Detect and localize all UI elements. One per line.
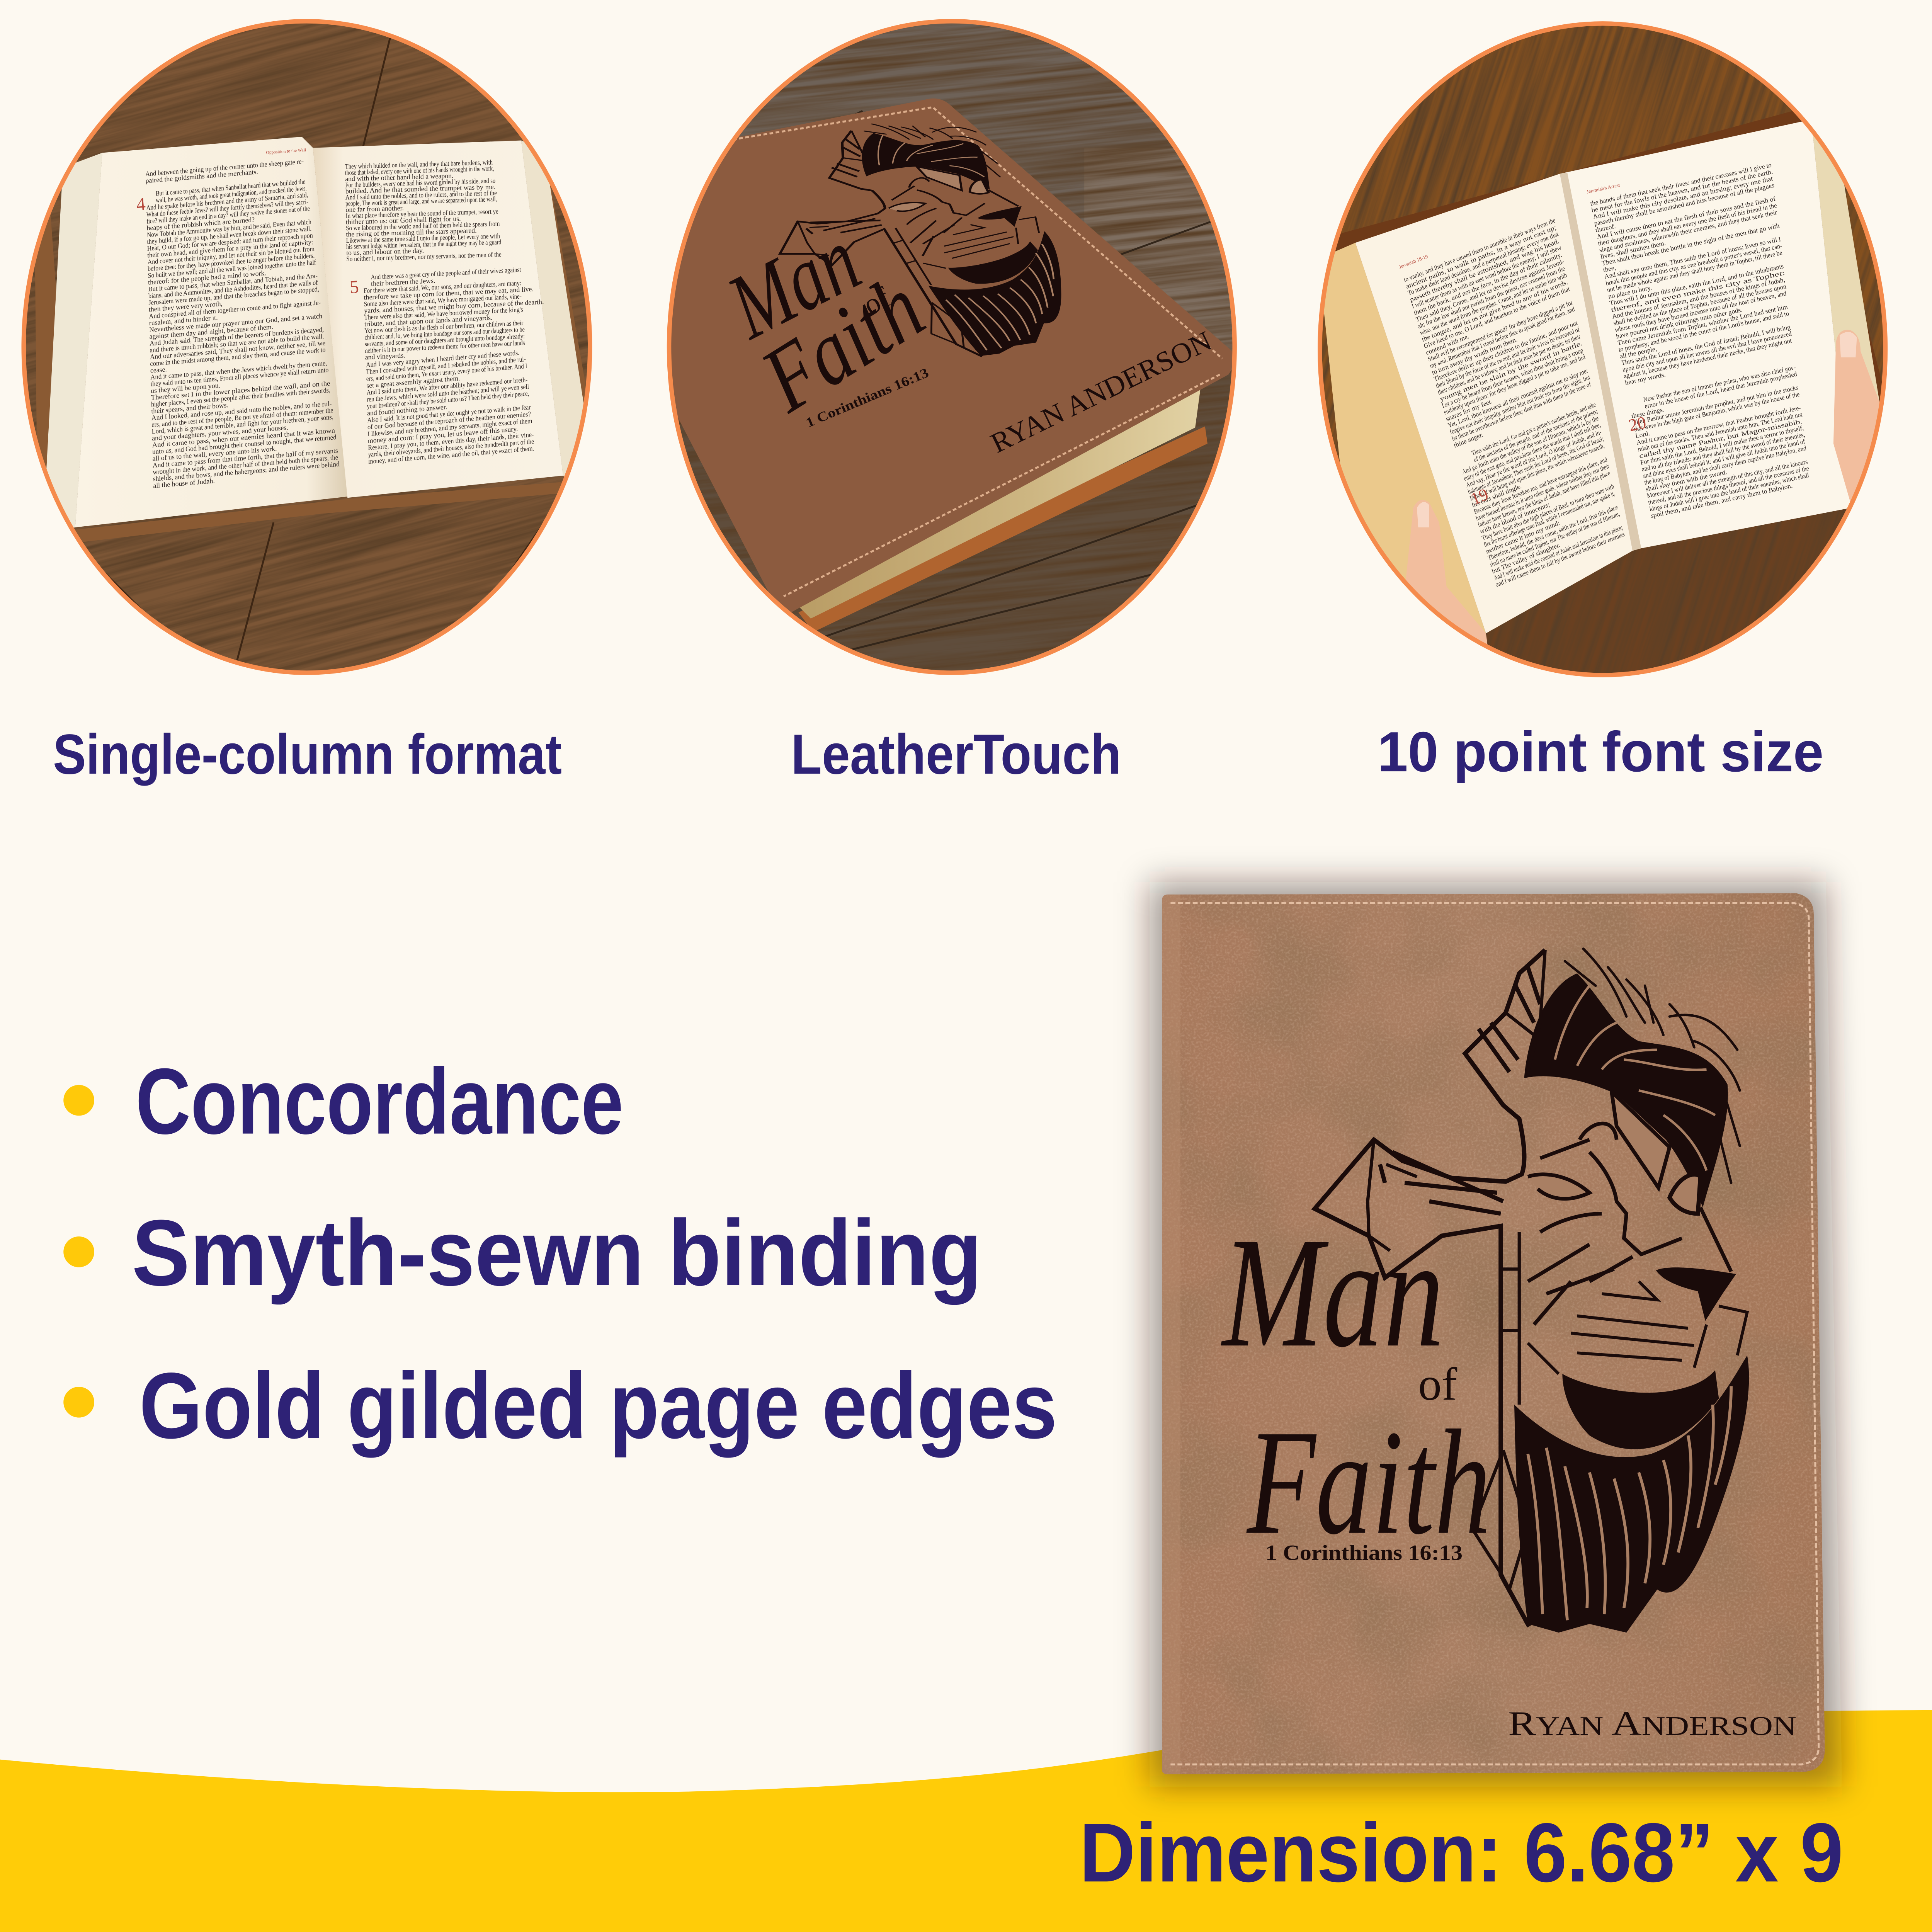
- left page text: Because they have forsaken me, and have estranged this place, and: [1473, 456, 1608, 515]
- cross hatching: [1380, 967, 1540, 1214]
- left page text: wise, nor the word from the prophet. Come, and let us smite him with: [1419, 271, 1568, 337]
- left page text: and your daughters, your wives, and your houses.: [152, 423, 288, 442]
- leather texture: [1158, 887, 1830, 1781]
- right page text bottom: ren the Jews, which were sold unto the heathen; and will ye even sell: [367, 383, 529, 403]
- right page text: and thine eyes shall behold it: and I will give all Judah into the hand of: [1642, 438, 1806, 480]
- left page text: fathers have known, nor the kings of Judah, and have filled this place: [1477, 469, 1611, 529]
- lower mane mass: [1514, 1355, 1749, 1633]
- right page text top: those that laded, every one with one of his hands wrought in the work,: [345, 164, 494, 177]
- yellow wave footer: [0, 1710, 1932, 1932]
- right page text bottom: yards, their oliveyards, and their houses, also the hundredth part of the: [368, 437, 534, 458]
- title lettering: Man: Man: [1220, 1205, 1444, 1380]
- right page text: shall be defiled as the place of Tophet, because of all the houses upon: [1613, 282, 1787, 327]
- left page text: to turn away thy wrath from them.: [1431, 335, 1518, 376]
- left page text: And I will make void the counsel of Judah and Jerusalem in this place;: [1493, 524, 1624, 582]
- right page text: Thus saith the Lord of hosts, the God of Israel; Behold, I will bring: [1621, 323, 1791, 367]
- chapter number 20: 20: [1627, 413, 1648, 435]
- left page text: They have built also the high places of Baal, to burn their sons with: [1481, 483, 1615, 542]
- left page text: Jerusalem were made up, and that the breaches began to be stopped,: [148, 285, 319, 306]
- left page text: fice? will they make an end in a day? will they revive the stones out of the: [146, 204, 310, 225]
- left page text: then they were very wroth,: [149, 299, 223, 313]
- left page text: but The valley of slaughter.: [1491, 541, 1561, 575]
- right page text: hear my words.: [1624, 371, 1666, 387]
- left page text: my soul. Remember that I stood before thee to speak good for them, and: [1429, 305, 1576, 370]
- left page text: Lord, which is great and terrible, and fight for your brethren, your sons,: [152, 413, 333, 435]
- right page text: thereof, and even make this city as Tophet:: [1610, 269, 1786, 313]
- cross inner lines: [1368, 950, 1545, 1590]
- left page: [75, 137, 347, 527]
- left page text: And he spake before his brethren and the army of Samaria, and said,: [146, 191, 308, 212]
- left page text: Behold, I will bring evil upon this place, the which whosoever heareth,: [1469, 442, 1605, 502]
- left page text: them the back, and not the face, in the day of their calamity.: [1413, 251, 1563, 317]
- left page text: shall no more be called Tophet, nor The valley of the son of Hinnom,: [1489, 510, 1621, 568]
- running head right page: Jeremiah's Arrest: [1586, 182, 1621, 195]
- left page text: So built we the wall; and all the wall was joined together unto the half: [148, 258, 316, 279]
- muzzle whisker rows: [1528, 1281, 1747, 1374]
- brow strap: [1612, 1092, 1670, 1188]
- right page text: the hands of them that seek their lives: and their carcases will I give to: [1590, 161, 1772, 207]
- photo: hands holding open Bible: [1004, 0, 1932, 974]
- left page text: habitants of Jerusalem; Thus saith the Lord of hosts, the God of Israel;: [1467, 435, 1604, 496]
- right page text top: builded. And he that sounded the trumpet was by me.: [345, 183, 496, 195]
- bullet 1: [63, 1085, 94, 1116]
- left page text: And between the going up of the corner unto the sheep gate re-: [145, 157, 304, 178]
- face creases: [1528, 1124, 1731, 1325]
- left page text: ers, and to the rest of the people, Be not ye afraid of them: remember the: [151, 406, 333, 429]
- right page text top: the rising of the morning till the stars appeared.: [346, 226, 477, 238]
- chapter number 4: 4: [135, 194, 146, 215]
- right page text top: [345, 158, 502, 263]
- brown wood table: [1004, 0, 1932, 974]
- right page text: And I will make this city desolate, and an hissing; every one that: [1592, 175, 1774, 221]
- left page text: their own head, and give them for a prey in the land of captivity:: [147, 238, 313, 259]
- upper mane stray hairs: [1565, 949, 1740, 1183]
- left page text: bians, and the Ammonites, and the Ashdodites, heard that the walls of: [148, 278, 318, 300]
- left page text: Then said they, Come, and let us devise devices against Jeremi-: [1415, 257, 1565, 323]
- left page text: they said unto us ten times, From all places whence ye shall return unto: [150, 366, 329, 388]
- left page text: Thus saith the Lord, Go and get a potter's earthen bottle, and take: [1471, 401, 1597, 457]
- grey wood table: [446, 0, 1530, 908]
- right page text middle: children: and, lo, we bring into bondage our sons and our daughters to be: [364, 325, 525, 341]
- leather strip behind book: [1325, 106, 1891, 493]
- running head left page: Jeremiah 18-19: [1398, 254, 1429, 270]
- right page text: these things.: [1631, 406, 1665, 420]
- dimension label: Dimension: 6.68” x 9: [1079, 1806, 1843, 1899]
- right page text: Now Pashur the son of Immer the priest, who was also chief gov-: [1643, 364, 1796, 403]
- right page text: ernor in the house of the Lord, heard that Jeremiah prophesied: [1644, 370, 1798, 410]
- left page stack: [1318, 243, 1486, 633]
- left page text: ah; for the law shall not perish from the priest, nor counsel from the: [1417, 265, 1566, 330]
- left page text: paired the goldsmiths and the merchants.: [145, 168, 258, 185]
- left page text: Therefore, behold, the days come, saith the Lord, that this place: [1487, 503, 1619, 562]
- left page text: And our adversaries said, They shall not know, neither see, till we: [150, 339, 325, 361]
- photo frame: left ellipse: [24, 21, 590, 673]
- right page text top: Likewise at the same time said I unto the people, Let every one with: [346, 232, 500, 244]
- left page text: Therefore set I in the lower places behind the wall, and on the: [151, 379, 330, 401]
- left page text: forgive not their iniquity, neither blot out their sin from thy sight, but: [1449, 373, 1591, 436]
- left page text: higher places, I even set the people after their families with their swords,: [151, 386, 330, 408]
- right page text: against it, because they have hardened their necks, that they might not: [1623, 337, 1793, 380]
- left page text: Give heed to me, O Lord, and hearken to the voice of them that: [1423, 285, 1571, 350]
- right page text top: people, The work is great and large, and we are separated upon the wall,: [345, 195, 497, 207]
- feature: smyth-sewn binding: Smyth-sewn binding: [132, 1201, 982, 1305]
- stitching: [1170, 903, 1819, 1764]
- left page text: Now Tobiah the Ammonite was by him, and he said, Even that which: [147, 218, 311, 239]
- left page text: all of us to the wall, every one unto his work.: [152, 445, 277, 463]
- right page text: kings of Judah will I give into the hand of their enemies, which shall: [1649, 471, 1810, 513]
- right page text bottom: And I said unto them, We after our ability have redeemed our breth-: [366, 376, 527, 396]
- left page text: thine anger.: [1453, 431, 1484, 449]
- right page text: their daughters, and they shall eat every one the flesh of his friend in the: [1597, 202, 1777, 247]
- feature: concordance: Concordance: [136, 1049, 624, 1154]
- cover stitching: [727, 107, 1222, 596]
- right page text middle: Some also there were that said, We have mortgaged our lands, vine-: [364, 292, 522, 308]
- right page text: shall slay them with the sword.: [1645, 468, 1728, 493]
- right page text: lives, shall straiten them.: [1600, 239, 1666, 260]
- right page text middle: There were also that said, We have borrowed money for the king's: [364, 306, 523, 321]
- left page text: before thee: for they have provoked thee to anger before the builders.: [148, 252, 315, 273]
- left page text: thereof: for the people had a mind to work.: [148, 269, 266, 286]
- right page text middle: their brethren the Jews.: [371, 277, 435, 287]
- leather cover edges: [34, 150, 589, 543]
- right page text bottom: money, and of the corn, the wine, and the oil, that ye exact of them.: [368, 444, 534, 465]
- right page text: Then Pashur smote Jeremiah the prophet, and put him in the stocks: [1632, 384, 1799, 427]
- right page text: miah out of the stocks. Then said Jeremiah unto him, The Lord hath not: [1637, 411, 1803, 453]
- wood table: [0, 0, 921, 984]
- cover lettering: Faith: Faith: [744, 255, 940, 432]
- caption: single-column format: Single-column format: [53, 723, 562, 786]
- right page text: be meat for the fowls of the heaven, and for the beasts of the earth.: [1591, 168, 1774, 214]
- left page text: passeth thereby shall be astonished, and wag his head.: [1409, 237, 1560, 303]
- book cover drop shadow: [1150, 882, 1842, 1787]
- right page text middle: servants, and some of our daughters are brought unto bondage already:: [365, 332, 525, 348]
- cover lettering: verse: 1 Corinthians 16:13: [804, 365, 931, 430]
- left eye: [1528, 1174, 1590, 1199]
- left page text: But it came to pass, that when Sanballat, and Tobiah, and the Ara-: [148, 272, 318, 293]
- right hand: [1833, 330, 1898, 517]
- mouth and chin shadow: [1562, 1370, 1719, 1449]
- left page text: And Judah said, The strength of the bearers of burdens is decayed,: [150, 325, 324, 347]
- right page text: Then came Jeremiah from Tophet, whither the Lord had sent him: [1617, 303, 1789, 347]
- left page text: Nevertheless we made our prayer unto our God, and set a watch: [149, 312, 322, 333]
- upper mane highlights: [1555, 986, 1715, 1170]
- left page text: And it came to pass from that time forth, that the half of my servants: [153, 447, 338, 469]
- chapter number 19: 19: [1468, 485, 1491, 509]
- left page text: have burned incense in it unto other gods, whom neither they nor their: [1475, 462, 1610, 522]
- left page text: cease.: [150, 365, 167, 374]
- bullet 2: [63, 1236, 94, 1267]
- right page text: For thus saith the Lord, Behold, I will make thee a terror to thyself,: [1640, 424, 1804, 466]
- right page text: upon this city and upon all her towns all the evil that I have pronounced: [1622, 330, 1793, 373]
- nose: [1656, 1267, 1736, 1321]
- left page text: snares for my feet.: [1445, 397, 1493, 423]
- cover base: [1162, 893, 1825, 1774]
- right page stack: [1811, 119, 1880, 508]
- left page text: And go forth unto the valley of the son of Hinnom, which is by the: [1461, 414, 1600, 476]
- caption: LeatherTouch: LeatherTouch: [791, 723, 1121, 786]
- left page text: to vanity, and they have caused them to stumble in their ways from the: [1403, 216, 1556, 284]
- right page text: not be made whole again: and they shall bury them in Tophet, till there be: [1606, 249, 1783, 294]
- left page text: But it came to pass, that when Sanballat heard that we builded the: [156, 177, 306, 197]
- left page text: and there is much rubbish; so that we are not able to build the wall.: [150, 332, 324, 354]
- right page text top: So neither I, nor my brethren, nor my servants, nor the men of the: [346, 250, 502, 263]
- right page text middle: therefore we take up corn for them, that we may eat, and live.: [364, 285, 534, 301]
- title lettering: Faith: Faith: [1245, 1399, 1491, 1566]
- left page text: wrought in the work, and the other half of them held both the spears, the: [153, 453, 338, 476]
- verse reference: 1 Corinthians 16:13: [1265, 1541, 1463, 1565]
- left page text: [1403, 216, 1648, 588]
- right page text top: one far from another.: [345, 204, 404, 213]
- left page text: his ears shall tingle.: [1471, 482, 1522, 509]
- gilded page block: [774, 382, 1201, 619]
- right page text: And I will cause them to eat the flesh of their sons and the flesh of: [1596, 195, 1776, 240]
- right page text middle: Yet now our flesh is as the flesh of our brethren, our children as their: [364, 319, 524, 335]
- right page text top: And I said unto the nobles, and to the rulers, and to the rest of the: [345, 189, 497, 201]
- right page text bottom: [366, 348, 534, 465]
- left page text: entry of the east gate, and proclaim there the words that I shall tell thee,: [1463, 421, 1602, 482]
- left page text: suddenly upon them: for they have digged a pit to take me, and hid: [1443, 353, 1586, 416]
- right page text: And shalt say unto them, Thus saith the Lord of hosts; Even so will I: [1604, 235, 1782, 281]
- right page text: [1590, 161, 1833, 519]
- left page text: the tongue, and let us not give heed to any of his words.: [1421, 278, 1569, 343]
- right page text middle: neither is it in our power to redeem them; for other men have our lands: [365, 339, 525, 354]
- left page text: And it came to pass, when our enemies heard that it was known: [152, 427, 335, 449]
- photo frame: right ellipse: [1320, 24, 1885, 675]
- right page text top: In what place therefore ye hear the sound of the trumpet, resort ye: [346, 207, 498, 219]
- right page text: thee,: [1602, 264, 1616, 274]
- right page text: whose roofs they have burned incense unto all the host of heaven, and: [1614, 289, 1787, 333]
- right page text bottom: and found nothing to answer.: [367, 403, 447, 417]
- right page text top: They which builded on the wall, and they that bare burdens, with: [345, 158, 493, 170]
- right page text bottom: set a great assembly against them.: [366, 374, 460, 389]
- right page text: And the houses of Jerusalem, and the houses of the kings of Judah,: [1612, 276, 1786, 320]
- right page text: and to all thy friends: and they shall fall by the sword of their enemies,: [1641, 431, 1806, 473]
- left page text: with the blood of innocents;: [1479, 501, 1551, 535]
- right page text middle: tribute, and that upon our lands and vineyards.: [364, 314, 493, 328]
- running heads: Opposition to the Wall: [266, 148, 306, 155]
- left page stack: [46, 153, 102, 530]
- left page text: heaps of the rubbish which are burned?: [146, 216, 255, 232]
- chapter number 5: 5: [349, 277, 359, 298]
- left page text: they build, if a fox go up, he shall even break down their stone wall.: [147, 224, 311, 245]
- leather book cover: [1158, 887, 1830, 1781]
- feature list: [63, 1049, 1057, 1458]
- right page text: all the people,: [1619, 345, 1657, 360]
- cross outline: [1315, 950, 1545, 1626]
- right page text: Then shalt thou break the bottle in the sight of the men that go with: [1601, 222, 1780, 267]
- cover lettering: Man: Man: [712, 207, 875, 359]
- left page text: fire for burnt offerings unto Baal, which I commanded not, nor spake it,: [1483, 490, 1616, 549]
- fingernails: [1417, 332, 1857, 527]
- left page text: their children, and be widows; and let their men be put to death; let their: [1437, 333, 1581, 396]
- left page text: I will scatter them as with an east wind before the enemy; I will shew: [1411, 244, 1562, 310]
- right page text: break this people and this city, as one breaketh a potter's vessel, that can-: [1605, 242, 1783, 287]
- right page text bottom: And I was very angry when I heard their cry and these words.: [366, 349, 520, 369]
- personalised name: R YAN A NDERSON: [1508, 1704, 1796, 1743]
- feature: gold gilded page edges: Gold gilded page edges: [139, 1354, 1057, 1458]
- left page text: come in the midst among them, and slay them, and cause the work to: [150, 346, 326, 367]
- right page text top: So we laboured in the work: and half of them held the spears from: [346, 219, 500, 232]
- back cover strip: [798, 426, 1208, 632]
- left page text: Yet, Lord, thou knowest all their counsel against me to slay me:: [1447, 367, 1589, 429]
- left page text: Let a cry be heard from their houses, when thou shalt bring a troop: [1441, 346, 1584, 410]
- left page text: unto us, and God had brought their counsel to nought, that we returned: [152, 433, 337, 456]
- right page text middle: yards, and houses, that we might buy corn, because of the dearth.: [364, 298, 544, 315]
- right page text bottom: of our God because of the reproach of the heathen our enemies?: [367, 410, 531, 431]
- left page text: And it came to pass, that when the Jews which dwelt by them came,: [150, 359, 327, 381]
- right page text: spoil them, and take them, and carry them to Babylon.: [1650, 482, 1793, 519]
- left page text: rusalem, and to hinder it.: [149, 314, 218, 327]
- right page text top: his servant lodge within Jerusalem, that in the night they may be a guard: [346, 238, 501, 250]
- right page text top: For the builders, every one had his sword girded by his side, and so: [345, 177, 495, 189]
- left page text: and I will cause them to fall by the sword before their enemies: [1495, 530, 1626, 588]
- right page text: thereof, and all the precious things thereof, and all the treasures of the: [1648, 464, 1810, 506]
- left page text: young men be slain by the sword in battle.: [1439, 339, 1583, 403]
- left page text: And say, Hear ye the word of the Lord, O kings of Judah, and in-: [1465, 428, 1602, 489]
- left page text: shields, and the bows, and the habergeons; and the rulers were behind: [153, 460, 340, 483]
- right page text top: to us, and labour on the day.: [346, 247, 424, 257]
- right page text: Thus will I do unto this place, saith the Lord, and to the inhabitants: [1609, 262, 1784, 307]
- upper mane mass: [1524, 973, 1728, 1208]
- left page text: What do these feeble Jews? will they fortify themselves? will they sacri-: [146, 198, 308, 218]
- lower mane strands: [1528, 1386, 1731, 1620]
- left page text: And I looked, and rose up, and said unto the nobles, and to the rul-: [151, 400, 332, 422]
- left page text: And cover not their iniquity, and let not their sin be blotted out from: [148, 245, 315, 266]
- right page: [1560, 119, 1852, 551]
- right page text: passeth thereby shall be astonished and hiss because of all the plagues: [1594, 182, 1775, 227]
- right page text: called thy name Pashur, but Magor-missabib.: [1638, 418, 1803, 460]
- photo frame: middle ellipse: [669, 21, 1235, 673]
- left page text: us they will be upon you.: [151, 381, 220, 395]
- cover lettering: name: RYAN ANDERSON: [986, 325, 1216, 459]
- right page text middle: For there were that said, We, our sons, and our daughters, are many:: [364, 279, 521, 294]
- left page text: [145, 155, 340, 490]
- right page text: that were in the high gate of Benjamin, which was by the house of the: [1633, 390, 1800, 433]
- right page: [313, 141, 563, 498]
- right page text: no place to bury.: [1608, 284, 1652, 300]
- left page text: their blood by the force of the sword; and let their wives be bereaved of: [1435, 326, 1580, 389]
- left page text: And conspired all of them together to come and to fight against Je-: [149, 299, 321, 320]
- left page text: wall, he was wroth, and took great indignation, and mocked the Jews.: [156, 184, 307, 204]
- right page text: siege and straitness, wherewith their enemies, and they that seek their: [1599, 209, 1777, 254]
- left page text: of the ancients of the people, and of the ancients of the priests;: [1473, 407, 1599, 464]
- right page text bottom: ers, and said unto them, Ye exact usury, every one of his brother. And I: [366, 362, 527, 383]
- right page text: And it came to pass on the morrow, that Pashur brought forth Jere-: [1636, 404, 1802, 446]
- left page text: let them be overthrown before thee; deal thus with them in the time of: [1451, 380, 1592, 442]
- photo: open Bible on wood, single column: [26, 23, 588, 671]
- right page text middle: And there was a great cry of the people and of their wives against: [371, 265, 521, 281]
- right page text bottom: Restore, I pray you, to them, even this day, their lands, their vine-: [368, 430, 534, 452]
- caption: 10 point font size: 10 point font size: [1378, 720, 1823, 784]
- left page text: ancient paths, to walk in paths, in a way not cast up;: [1405, 223, 1557, 290]
- left page text: Therefore deliver up their children to the famine, and pour out: [1433, 319, 1578, 383]
- left page text: Hear, O our God; for we are despised: and turn their reproach upon: [147, 231, 313, 252]
- right page text top: thither unto us: our God shall fight for us.: [346, 214, 461, 226]
- right page text: the king of Babylon, and he shall carry them captive into Babylon, and: [1644, 444, 1807, 486]
- left page text: neither came it into my mind:: [1485, 519, 1561, 555]
- right page text bottom: I likewise, and my brethren, and my servants, might exact of them: [367, 417, 532, 438]
- left page text: against them day and night, because of them.: [149, 323, 273, 340]
- leather front cover: [653, 99, 1233, 612]
- photo: closed leather Bible: [446, 0, 1530, 908]
- gutter shadow: [1560, 172, 1641, 551]
- right page text: have poured out drink offerings unto other gods.: [1616, 306, 1743, 340]
- right page text top: and with the other hand held a weapon.: [345, 172, 454, 183]
- right page text bottom: your brethren? or shall they be sold unto us? Then held they their peace,: [367, 389, 529, 410]
- left page text: To make their land desolate, and a perpetual hissing; every one that: [1407, 230, 1559, 297]
- right page text: Lord.: [1634, 429, 1650, 440]
- right page text bottom: Then I consulted with myself, and I rebuked the nobles, and the rul-: [366, 355, 526, 376]
- lion and cross emblem on cover: [726, 97, 1102, 394]
- left page: [1355, 174, 1633, 633]
- right page text: to prophesy; and he stood in the court of the Lord's house; and said to: [1618, 310, 1789, 354]
- left page text: all the house of Judah.: [153, 477, 215, 490]
- right page text: Moreover I will deliver all the strength of this city, and all the labours: [1646, 458, 1808, 500]
- right page stack: [521, 141, 585, 478]
- left page text: their spears, and their bows.: [151, 401, 228, 415]
- left page text: contend with me.: [1425, 332, 1470, 357]
- left hand: [1386, 500, 1493, 690]
- right eye: [1670, 1174, 1701, 1214]
- left page text: Shall evil be recompensed for good? for they have digged a pit for: [1427, 299, 1573, 363]
- lion and cross emblem: [1315, 949, 1749, 1633]
- bullet 3: [63, 1387, 94, 1418]
- cover lettering: of: of: [858, 281, 895, 321]
- right page text middle: [363, 265, 545, 361]
- right page text middle: and vineyards.: [365, 351, 405, 361]
- right page text bottom: Also I said, It is not good that ye do: ought ye not to walk in the fear: [367, 403, 531, 424]
- right page text bottom: money and corn: I pray you, let us leave off this usury.: [368, 425, 518, 445]
- right page text: thereof.: [1595, 222, 1616, 234]
- title lettering: of: of: [1418, 1358, 1458, 1410]
